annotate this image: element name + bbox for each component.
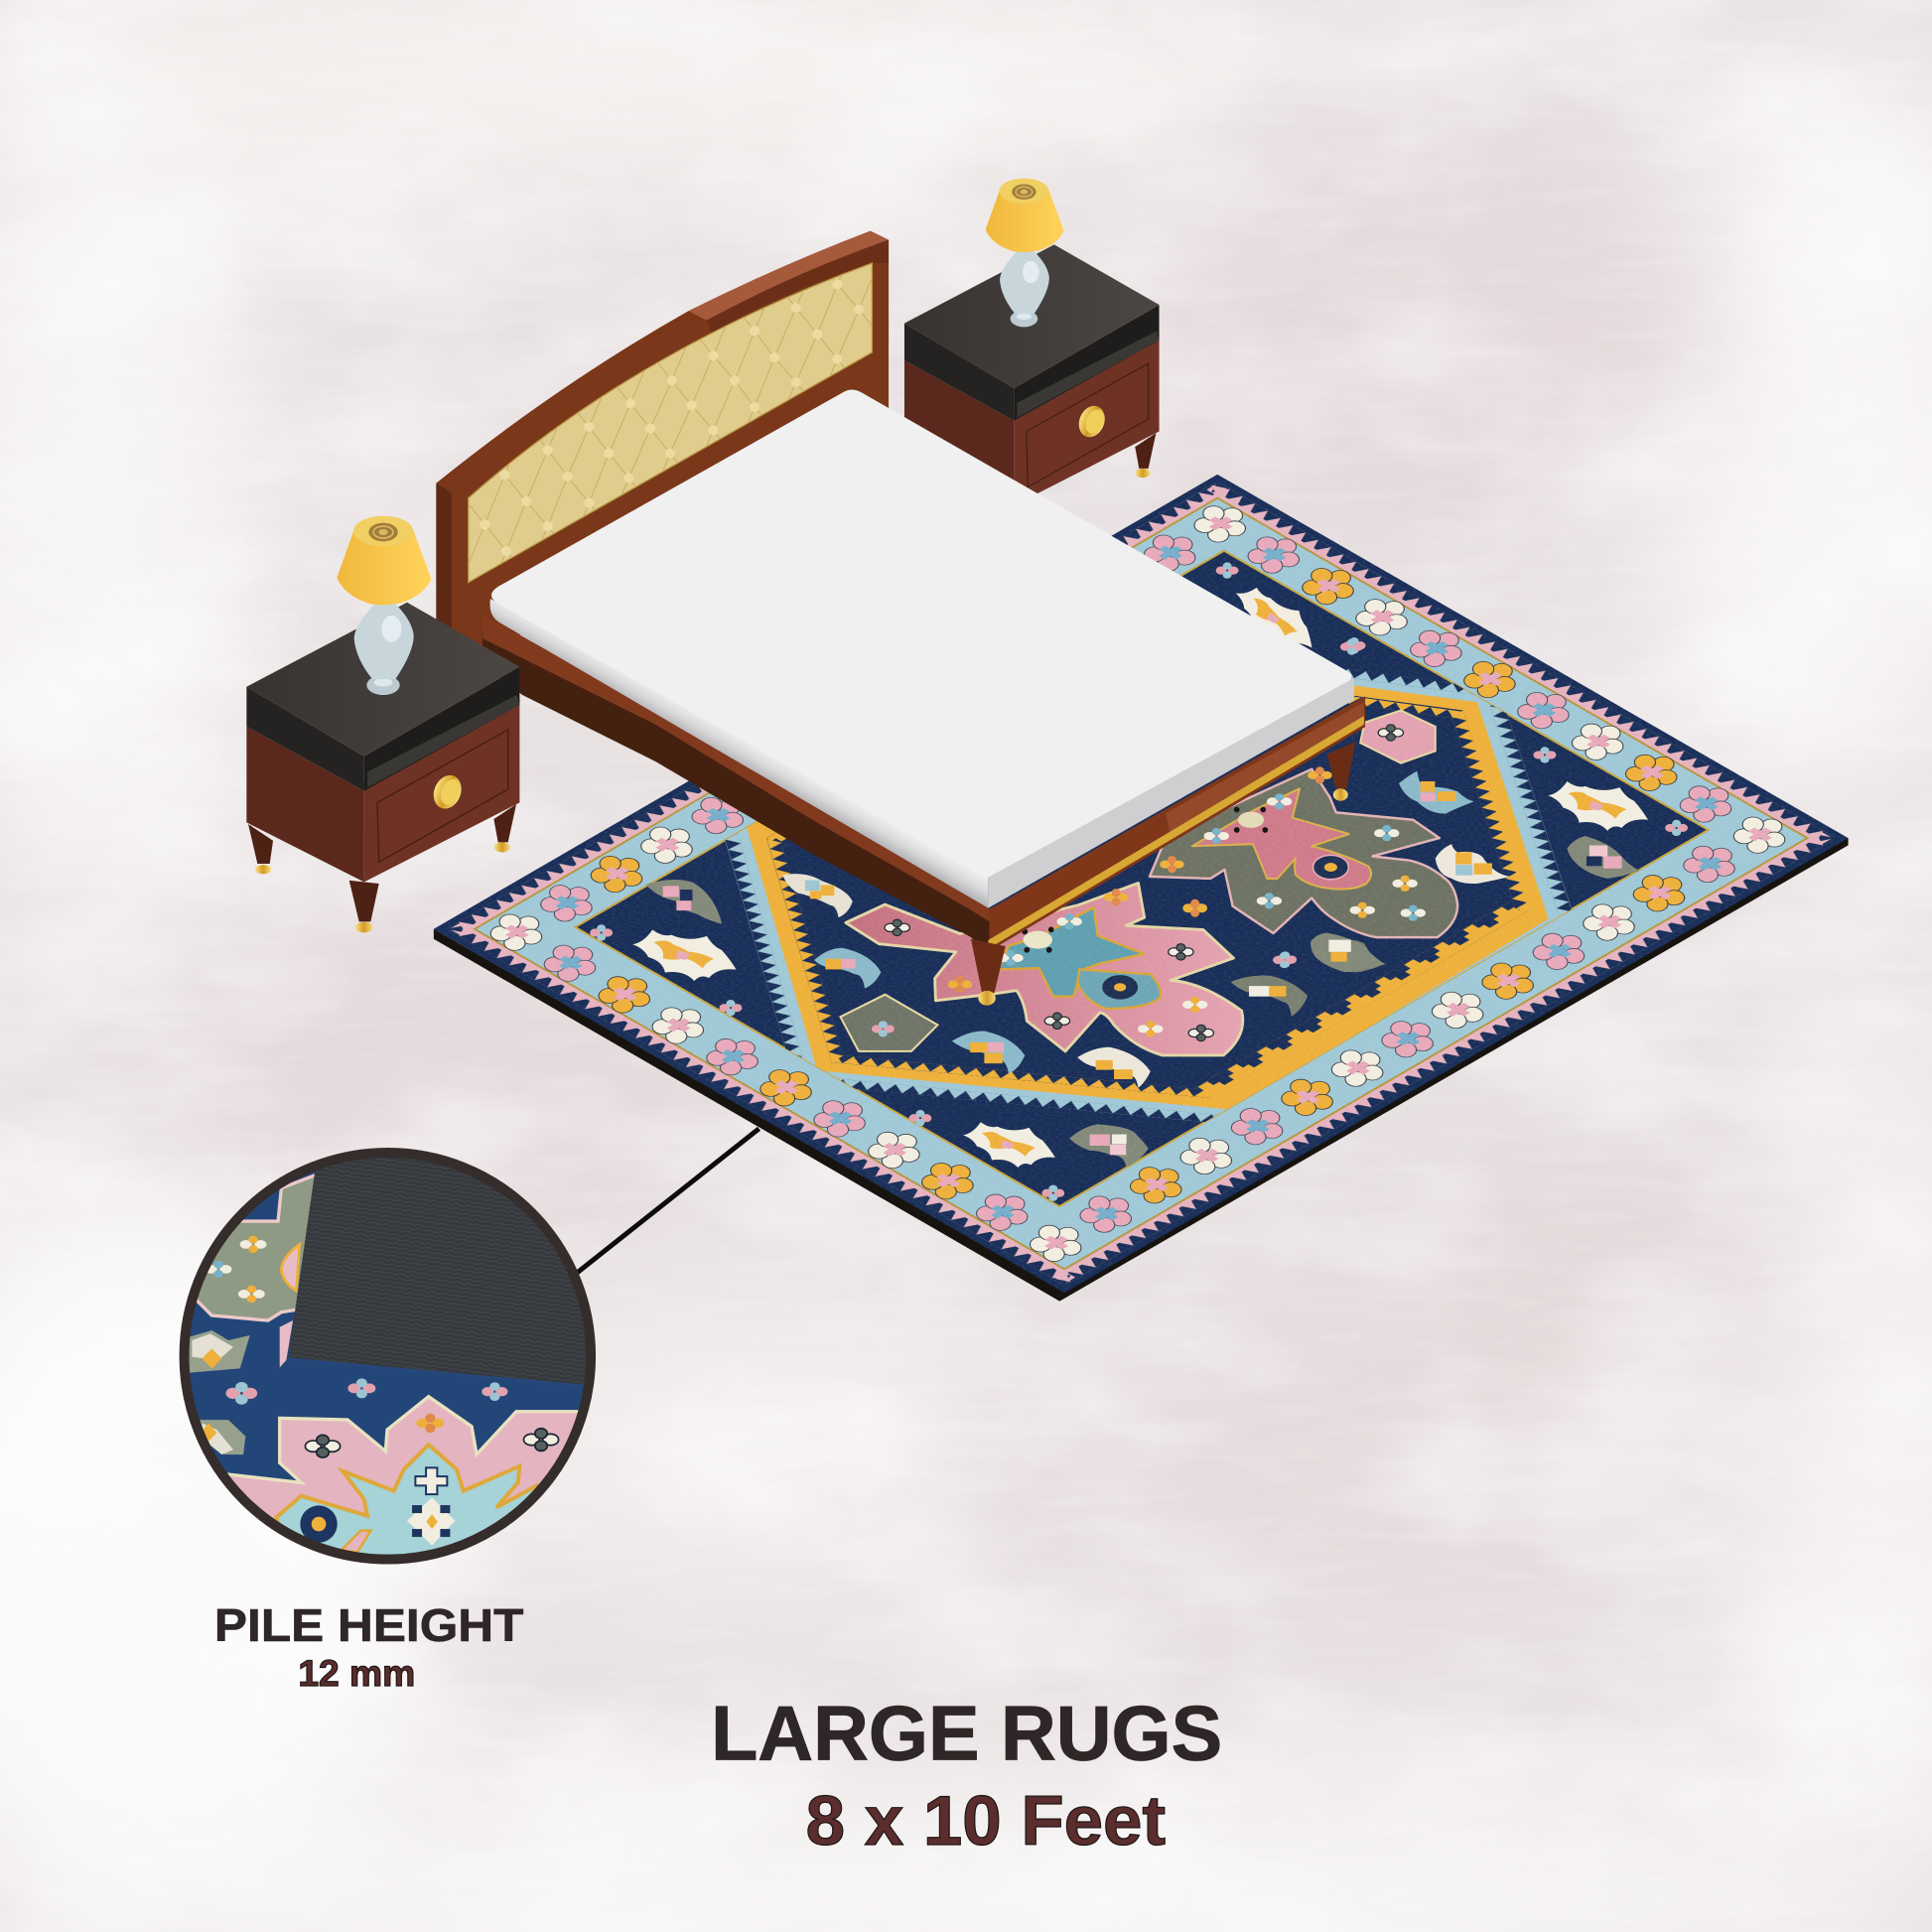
bed (436, 231, 1365, 1006)
subtitle: 8 x 10 feet: 8 x 10 Feet (806, 1781, 1166, 1860)
green medallion (1150, 637, 1688, 1017)
bed frame left rail (482, 614, 990, 951)
callout connector line (576, 1129, 759, 1274)
brass trim (988, 716, 1364, 949)
pink medallion (782, 874, 1386, 1201)
rug flat pattern: border and field (434, 475, 1849, 1293)
lamp on right nightstand (986, 179, 1064, 327)
headboard (436, 231, 889, 658)
label: pile height: PILE HEIGHT (214, 1599, 523, 1651)
circle outline (185, 1153, 591, 1560)
rug thickness edge (434, 838, 1849, 1302)
rug pile texture (434, 475, 1849, 1293)
border flowers (475, 497, 1805, 1267)
top and left corner motifs (590, 562, 1363, 1016)
right bed leg (1327, 742, 1355, 801)
front bed leg (971, 939, 1006, 1006)
title: large rugs: LARGE RUGS (711, 1689, 1222, 1776)
callout: pile height close-up circle (179, 1148, 596, 1565)
label: 12 mm: 12 mm (298, 1652, 415, 1694)
rug (434, 475, 1849, 1302)
close-up rug photo with folded backing (169, 1132, 632, 1595)
lamp on left nightstand (337, 516, 431, 695)
left nightstand (246, 516, 519, 932)
tufted diamond lattice (469, 274, 872, 566)
bed frame right rail (990, 696, 1365, 951)
mattress (489, 389, 1354, 908)
right nightstand (904, 244, 1160, 553)
